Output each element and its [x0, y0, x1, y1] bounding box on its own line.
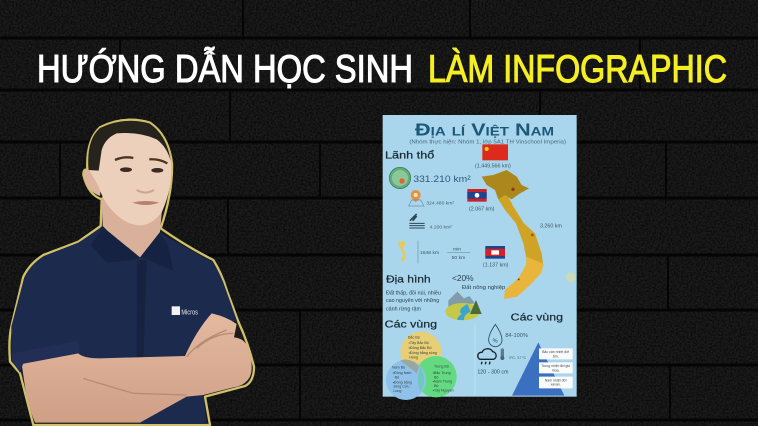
- venn diagram: Bắc Bộ: [408, 335, 420, 340]
- sea area: 4.200 km²: [430, 224, 452, 230]
- icon: sun island: [566, 272, 576, 282]
- title: [37, 47, 727, 91]
- divider: [474, 323, 476, 395]
- heading: regions right: Các vùng: [511, 313, 563, 324]
- width marker: min: [453, 246, 461, 252]
- hair: [88, 121, 171, 171]
- presenter portrait: [9, 120, 254, 425]
- venn diagram: Bộ: [434, 384, 438, 388]
- crossed arms: [22, 313, 252, 423]
- terrain description: cảnh rừng rậm: [386, 306, 422, 312]
- terrain description: [386, 291, 441, 312]
- climate pyramid: Bắc cận nhiệt đới: [542, 349, 569, 354]
- venn diagram: •Nam Trung: [433, 380, 452, 384]
- heading: regions left: Các vùng: [385, 320, 437, 331]
- ear: [84, 168, 102, 196]
- venn diagram: sông Cửu: [393, 385, 409, 389]
- climate pyramid: xavan.: [551, 383, 561, 387]
- venn diagram: •Đồng bằng sông: [409, 350, 437, 355]
- climate pyramid: Nam nhiệt đới: [545, 378, 567, 382]
- Laos flag and area: (2.067 km): [469, 206, 495, 212]
- sleeve cuff: [12, 341, 80, 372]
- shirt logo: Micros: [181, 309, 198, 316]
- venn diagram: •Bắc Trung: [433, 370, 451, 375]
- eyes, nose and mouth: [115, 157, 167, 205]
- China flag and area: (1.449,566 km): [475, 163, 511, 169]
- humidity value: 84-100%: [505, 333, 528, 339]
- neck: [102, 197, 162, 257]
- Cambodia flag and area: (1.137 km): [483, 262, 509, 268]
- heading: terrain: Địa hình: [386, 274, 431, 285]
- icon: humidity drop: %: [493, 338, 498, 344]
- Cambodia flag and area: [483, 246, 509, 268]
- venn diagram: •Đông Nam: [393, 371, 411, 375]
- climate pyramid: [512, 342, 573, 396]
- poster title: Địa lí Việt Nam: [415, 119, 554, 139]
- venn diagram: •Tây Nguyên: [433, 389, 454, 393]
- venn diagram: [386, 332, 457, 400]
- farmland share: <20%: [452, 273, 474, 283]
- icon: humidity drop: [489, 324, 502, 347]
- Laos flag and area: [467, 189, 495, 212]
- farmland label: Đất nông nghiệp: [462, 285, 505, 291]
- venn diagram: Trung Bộ: [434, 364, 449, 368]
- length marker: [418, 241, 439, 263]
- icon: sea waves: [409, 214, 425, 228]
- China flag and area: [475, 144, 511, 169]
- icon: land pin: [409, 190, 424, 206]
- venn diagram: •Đồng bằng: [393, 379, 412, 384]
- infographic poster: [383, 115, 577, 400]
- climate pyramid: ẩm,: [553, 354, 559, 358]
- venn diagram: •Đông Bắc Bộ: [409, 345, 431, 350]
- icon: mountain landscape: [445, 292, 482, 320]
- coastline label: 3.260 km: [540, 223, 562, 229]
- venn diagram: Nam Bộ: [392, 365, 405, 369]
- shirt logo: [172, 306, 198, 316]
- venn diagram: Hồng: [409, 356, 418, 360]
- title: HƯỚNG DẪN HỌC SINH: [37, 47, 413, 91]
- icon: rain cloud: [478, 349, 496, 364]
- icon: area globe: [389, 167, 411, 189]
- head: [89, 128, 171, 225]
- venn diagram: Long: [393, 389, 401, 393]
- width marker: 50 km: [452, 255, 465, 261]
- temperature: 0ºC- 37 ºC: [509, 356, 527, 360]
- shirt collar: [91, 227, 173, 271]
- map of Vietnam: [482, 170, 544, 299]
- rainfall: 120 - 300 cm: [477, 370, 509, 376]
- total area: 331.210 km²: [413, 174, 471, 184]
- length marker: 1648 km: [420, 250, 439, 256]
- venn diagram: Bộ: [395, 376, 399, 380]
- climate pyramid: mùa,: [552, 368, 560, 372]
- shirt placket shadow: [137, 260, 147, 360]
- forearm fold: [83, 330, 233, 395]
- heading: territory: Lãnh thổ: [385, 150, 435, 162]
- climate pyramid: Trung nhiệt đới gió: [541, 364, 570, 368]
- poster subtitle: (Nhóm thực hiện: Nhóm 1, lớp 5A1 TH Vinschool Imperia): [409, 139, 566, 145]
- venn diagram: Bộ: [434, 375, 438, 379]
- small map: [397, 241, 406, 262]
- venn diagram: •Tây Bắc Bộ: [409, 340, 429, 345]
- shirt: [11, 227, 237, 424]
- icon: thermometer: [500, 348, 504, 360]
- width marker: [447, 246, 470, 261]
- land area: 324.480 km²: [426, 200, 454, 206]
- terrain description: cao nguyên với những: [386, 298, 439, 304]
- terrain description: Đất thấp, đồi núi, nhiều: [386, 291, 441, 297]
